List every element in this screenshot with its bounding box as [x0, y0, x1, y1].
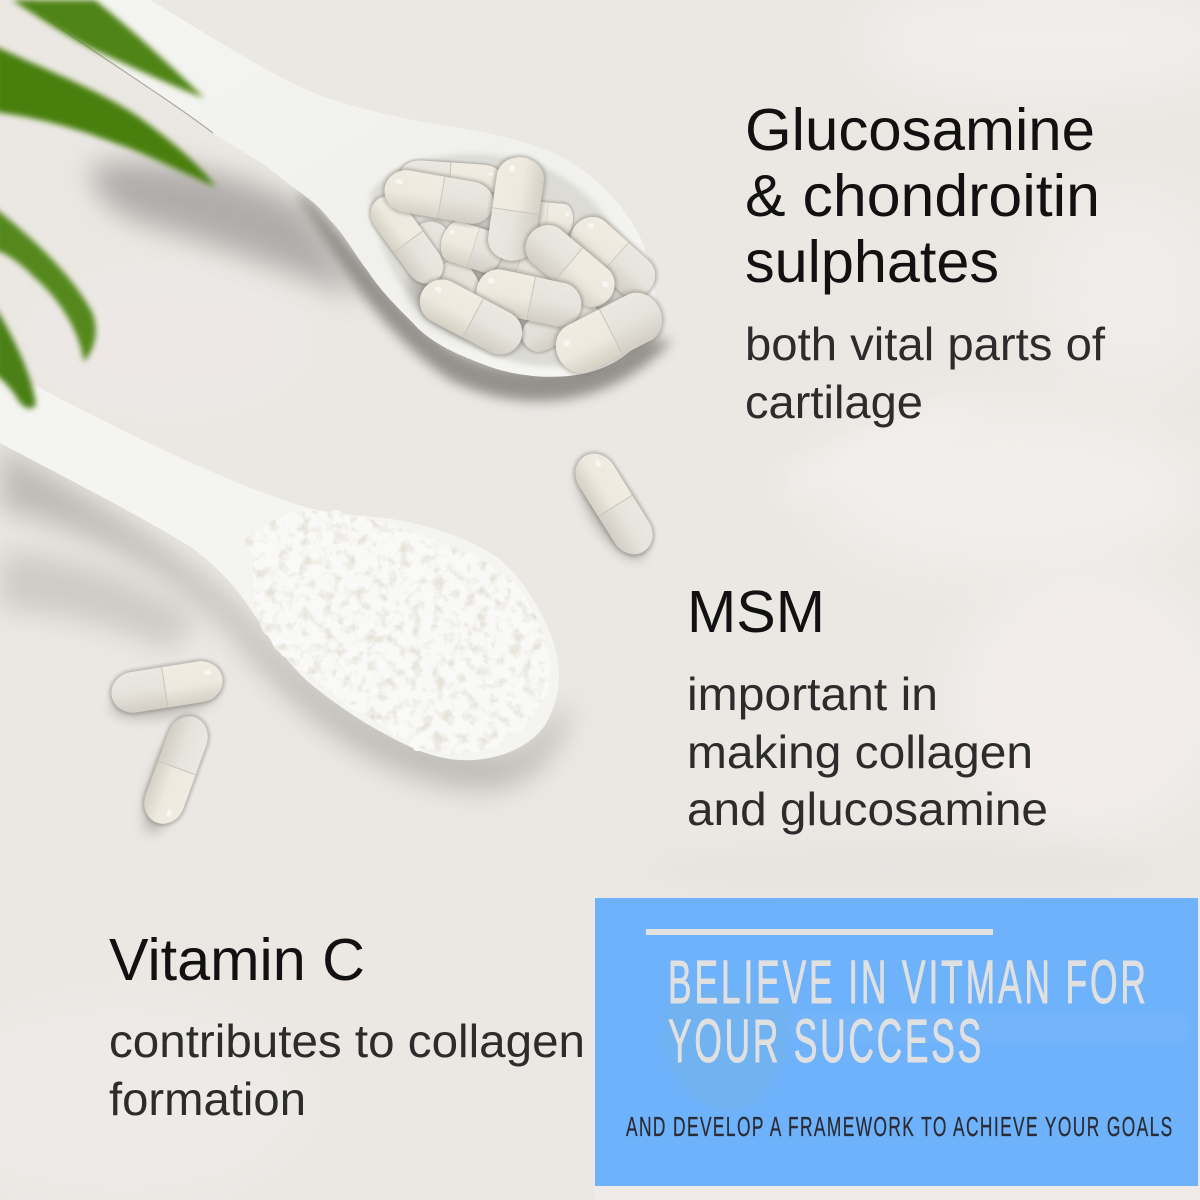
heading: Vitamin C [109, 927, 365, 993]
loose capsule by MSM [564, 443, 664, 568]
description [745, 318, 1105, 428]
description: making collagen [687, 726, 1033, 778]
spoon body [37, 0, 656, 377]
capsules in front [379, 152, 674, 385]
panel subtitle: AND DEVELOP A FRAMEWORK TO ACHIEVE YOUR GOALS [626, 1111, 1172, 1142]
text block: vitamin C [109, 927, 585, 1125]
heading: & chondroitin [745, 163, 1100, 229]
panel rule [646, 929, 993, 935]
heading [745, 97, 1100, 295]
two loose capsules at left [106, 656, 228, 839]
description: formation [109, 1073, 306, 1125]
panel title: BELIEVE IN VITMAN FOR [668, 948, 1146, 1016]
shadow: lower spoon [0, 445, 570, 790]
heading: sulphates [745, 229, 999, 295]
description: cartilage [745, 376, 923, 428]
spoon hollow [370, 154, 640, 366]
shadow: upper spoon [300, 190, 672, 401]
panel title [668, 948, 1146, 1075]
blue call-to-action panel [595, 898, 1198, 1186]
handle edge line [37, 12, 213, 133]
spoon body [0, 378, 559, 760]
description [109, 1015, 585, 1125]
lower spoon with powder [0, 378, 559, 760]
shadow: leaves on the table [90, 162, 360, 300]
blurred green leaves [0, 0, 216, 408]
powder heap [245, 510, 551, 752]
faint background spoon ghost [662, 990, 1190, 1112]
text block: glucosamine and chondroitin [745, 97, 1105, 428]
capsules behind [360, 157, 610, 360]
description: and glucosamine [687, 783, 1048, 835]
description: contributes to collagen [109, 1015, 585, 1067]
text block: MSM [687, 579, 1048, 835]
description [687, 668, 1048, 835]
heading: Glucosamine [745, 97, 1095, 163]
panel title: YOUR SUCCESS [668, 1007, 981, 1075]
heading: MSM [687, 579, 825, 645]
description: both vital parts of [745, 318, 1105, 370]
upper spoon with capsules [37, 0, 674, 385]
description: important in [687, 668, 938, 720]
